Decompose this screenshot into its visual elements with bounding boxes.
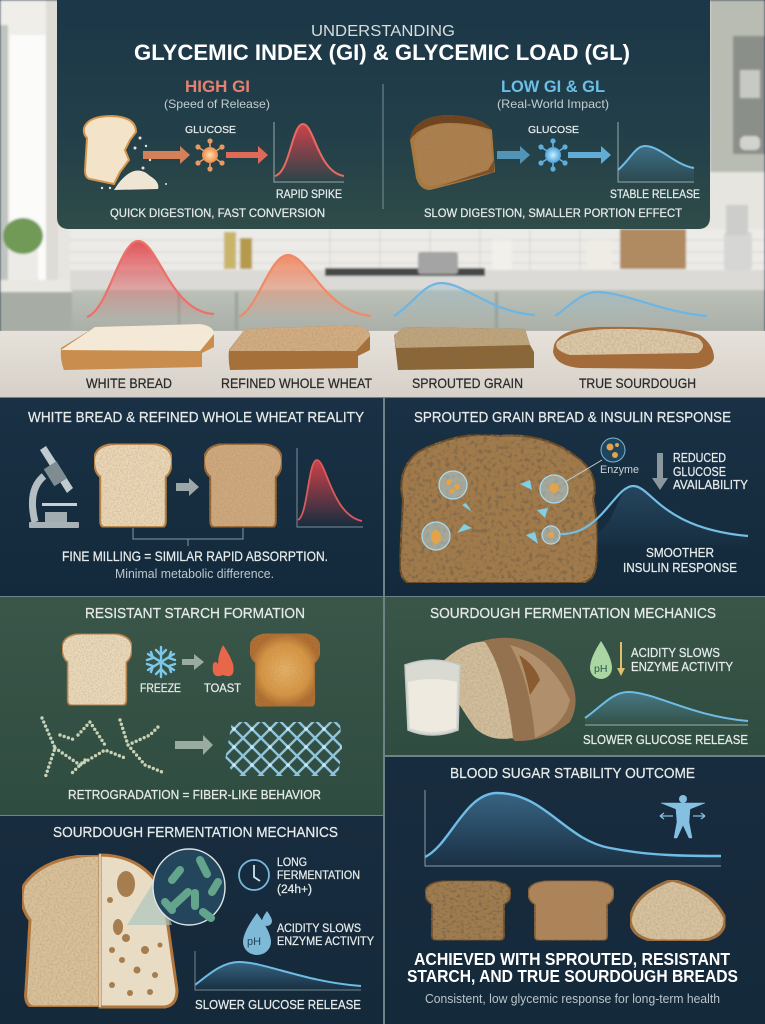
acidity text: ACIDITY SLOWS bbox=[631, 646, 720, 660]
chart: slower release bbox=[585, 692, 748, 725]
bread labels row bbox=[86, 375, 696, 391]
icon: pH drop bbox=[590, 641, 612, 679]
high GI heading bbox=[164, 78, 270, 111]
panel heading: SOURDOUGH FERMENTATION MECHANICS bbox=[53, 825, 338, 841]
toast label: TOAST bbox=[204, 683, 241, 695]
bread: white slice on counter bbox=[61, 324, 214, 370]
icon: microscope bbox=[29, 446, 79, 528]
fermentation text: LONG bbox=[277, 857, 307, 869]
bread: toast bbox=[250, 634, 320, 706]
fermentation text: (24h+) bbox=[277, 884, 312, 896]
acidity text bbox=[277, 921, 374, 948]
bread: half comparison slice bbox=[22, 854, 177, 1007]
bread: white slice bbox=[94, 444, 172, 527]
arrow: bread to glucose bbox=[143, 146, 190, 164]
title: UNDERSTANDING bbox=[311, 23, 455, 40]
high GI heading: (Speed of Release) bbox=[164, 97, 270, 111]
caption: SLOWER GLUCOSE RELEASE bbox=[195, 997, 361, 1012]
bread: sprouted bbox=[425, 881, 511, 940]
arrow: grey bbox=[176, 478, 199, 496]
high GI heading: HIGH GI bbox=[185, 78, 250, 96]
arrow: glucose to spike bbox=[226, 146, 268, 164]
fermentation text bbox=[277, 857, 360, 896]
caption: FINE MILLING = SIMILAR RAPID ABSORPTION. bbox=[62, 548, 328, 564]
bread labels row: TRUE SOURDOUGH bbox=[579, 375, 696, 391]
chart: stable release bbox=[618, 122, 694, 182]
panel: header bbox=[57, 0, 710, 229]
sprouted curve bbox=[394, 283, 535, 320]
insulin caption bbox=[623, 546, 737, 575]
icon: pH drop: pH bbox=[594, 663, 607, 675]
arrow bbox=[182, 654, 204, 670]
sourdough curve bbox=[555, 292, 707, 320]
white bread curve bbox=[87, 241, 214, 320]
acidity text: ENZYME ACTIVITY bbox=[277, 934, 374, 948]
icon: snowflake bbox=[147, 647, 175, 677]
caption bbox=[62, 548, 328, 581]
reduced availability text: REDUCED bbox=[673, 451, 726, 465]
panel: sourdough mechanics lower bbox=[0, 816, 383, 1024]
chart: insulin curve bbox=[560, 486, 748, 545]
title bbox=[134, 23, 630, 65]
icon: starter jar bbox=[405, 660, 460, 735]
bracket bbox=[133, 528, 243, 546]
countertop bbox=[0, 331, 765, 398]
bread: resistant starch bbox=[528, 881, 614, 940]
high GI caption: QUICK DIGESTION, FAST CONVERSION bbox=[110, 206, 325, 220]
panel: white bread reality bbox=[0, 398, 383, 596]
icon: crumbling white bread bbox=[84, 116, 167, 190]
panel heading: RESISTANT STARCH FORMATION bbox=[85, 606, 305, 622]
insulin caption: INSULIN RESPONSE bbox=[623, 561, 737, 575]
glucose label: GLUCOSE bbox=[185, 124, 236, 136]
low GI caption: SLOW DIGESTION, SMALLER PORTION EFFECT bbox=[424, 206, 683, 220]
bread: sourdough bbox=[630, 880, 725, 941]
panel heading: BLOOD SUGAR STABILITY OUTCOME bbox=[450, 766, 695, 782]
low GI heading: LOW GI & GL bbox=[501, 78, 605, 96]
bread labels row: WHITE BREAD bbox=[86, 375, 172, 391]
acidity text bbox=[631, 646, 734, 674]
refined wheat curve bbox=[239, 255, 371, 320]
outcome headline bbox=[407, 949, 738, 986]
caption: Minimal metabolic difference. bbox=[115, 566, 274, 581]
freeze label: FREEZE bbox=[140, 683, 181, 695]
low GI heading bbox=[497, 78, 609, 111]
chart: stability curve bbox=[425, 790, 721, 866]
chart: spike bbox=[297, 448, 363, 527]
fermentation text: FERMENTATION bbox=[277, 870, 360, 882]
icon: clock bbox=[239, 860, 269, 890]
icon: flame bbox=[213, 645, 234, 676]
column divider bbox=[382, 84, 384, 209]
outcome headline: ACHIEVED WITH SPROUTED, RESISTANT bbox=[414, 949, 730, 969]
panel heading: SPROUTED GRAIN BREAD & INSULIN RESPONSE bbox=[414, 409, 731, 426]
bread labels row: REFINED WHOLE WHEAT bbox=[221, 375, 372, 391]
panel heading: WHITE BREAD & REFINED WHOLE WHEAT REALITY bbox=[28, 409, 364, 426]
reduced availability text: GLUCOSE bbox=[673, 465, 726, 479]
caption: RETROGRADATION = FIBER-LIKE BEHAVIOR bbox=[68, 787, 321, 802]
kitchen background photo bbox=[0, 0, 765, 400]
icon: glucose molecule blue bbox=[538, 138, 568, 172]
caption: SLOWER GLUCOSE RELEASE bbox=[583, 732, 748, 747]
bread labels row: SPROUTED GRAIN bbox=[412, 375, 523, 391]
panel heading: SOURDOUGH FERMENTATION MECHANICS bbox=[430, 606, 716, 622]
arrow bbox=[175, 735, 213, 755]
outcome subtitle: Consistent, low glycemic response for long-term health bbox=[425, 992, 720, 1006]
low GI heading: (Real-World Impact) bbox=[497, 97, 609, 111]
acidity text: ENZYME ACTIVITY bbox=[631, 660, 734, 674]
panel: resistant starch bbox=[0, 597, 383, 815]
insulin caption: SMOOTHER bbox=[646, 546, 714, 560]
chart: rapid spike bbox=[274, 122, 344, 182]
icon: enzyme bubble bbox=[565, 438, 625, 482]
title: GLYCEMIC INDEX (GI) & GLYCEMIC LOAD (GL) bbox=[134, 40, 630, 65]
acidity text: ACIDITY SLOWS bbox=[277, 921, 361, 935]
bread: sprouted slice on counter bbox=[394, 327, 534, 370]
icon: pH drops bbox=[243, 911, 272, 955]
bread: refined slice bbox=[204, 444, 282, 527]
bread: fresh slice bbox=[62, 634, 132, 705]
bread: sourdough slice on counter bbox=[553, 327, 714, 369]
icon: sourdough loaf bbox=[440, 638, 576, 741]
stable release label: STABLE RELEASE bbox=[610, 189, 700, 201]
reduced availability text: AVAILABILITY bbox=[673, 478, 749, 492]
molecules: starch chains bbox=[42, 718, 162, 778]
rapid spike label: RAPID SPIKE bbox=[276, 189, 342, 201]
glucose label low: GLUCOSE bbox=[528, 124, 579, 136]
arrow: glucose to stable curve bbox=[568, 146, 611, 164]
arrow: loaf to glucose bbox=[497, 146, 530, 164]
panel: sprouted grain bbox=[385, 398, 765, 596]
bread: refined slice on counter bbox=[229, 325, 370, 370]
panel: stability outcome bbox=[385, 757, 765, 1024]
chart: slow release bbox=[195, 951, 361, 990]
arrow: acidity down bbox=[617, 642, 625, 676]
lattice bbox=[225, 722, 342, 776]
reduced availability text bbox=[673, 451, 749, 492]
arrow: down bbox=[652, 453, 668, 490]
icon: glucose molecule orange bbox=[195, 138, 225, 172]
icon: whole grain loaf bbox=[410, 115, 495, 190]
page dividers base bbox=[0, 397, 765, 1024]
magnifier: bacteria bbox=[127, 849, 225, 925]
icon: balanced person bbox=[660, 796, 705, 838]
panel: sourdough mechanics upper bbox=[385, 597, 765, 755]
bread: sprouted cross-section bbox=[400, 435, 597, 583]
icon: pH drops: pH bbox=[247, 936, 261, 948]
enzyme label: Enzyme bbox=[600, 464, 639, 476]
